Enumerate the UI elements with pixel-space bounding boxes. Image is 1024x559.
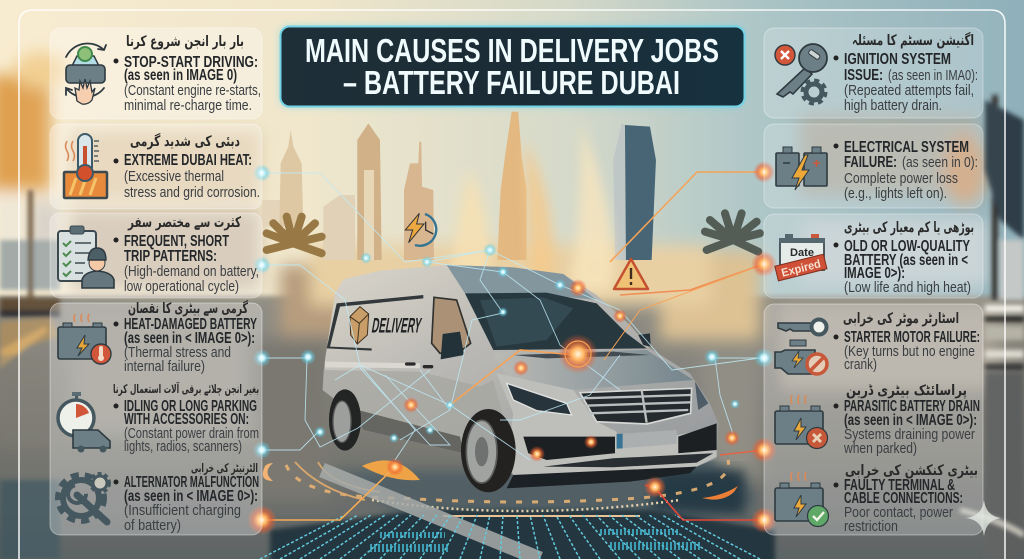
side window — [432, 297, 471, 353]
text: extreme heat: EXTREME DUBAI HEAT: — [124, 152, 252, 169]
text: stop-start driving — [114, 34, 261, 114]
text: stop-start driving: بار بار انجن شروع کرنا — [126, 34, 244, 50]
headlight — [507, 383, 572, 415]
text: alternator: (Insufficient charging — [124, 502, 241, 519]
icon: twin batteries with bolt — [776, 147, 827, 190]
text: idling: IDLING OR LONG PARKING — [124, 398, 257, 415]
text: parasitic drain: Systems draining power — [844, 426, 975, 443]
panel: heat damage, idling, alternator — [50, 299, 262, 535]
text: extreme heat: دبئی کی شدید گرمی — [130, 132, 240, 150]
mirror — [441, 332, 464, 359]
text: short trips — [114, 215, 259, 295]
license plate — [617, 430, 677, 449]
panel: ignition — [764, 28, 983, 118]
text: short trips: low operational cycle) — [124, 278, 239, 295]
icon: key, error and gear — [775, 44, 827, 104]
text: short trips: TRIP PATTERNS: — [124, 248, 217, 265]
text: starter: crank) — [844, 356, 877, 373]
icon: warning triangle — [614, 259, 648, 289]
icon: key and engine — [775, 320, 827, 374]
text: extreme heat — [114, 132, 260, 201]
icon: stopwatch and van — [58, 392, 110, 452]
text: heat-damaged battery: HEAT-DAMAGED BATTERY — [124, 316, 257, 333]
text: faulty terminals — [834, 463, 978, 535]
text: starter: اسٹارٹر موٹر کی خرابی — [843, 311, 959, 327]
text: short trips: (High-demand on battery, — [124, 263, 259, 280]
icon: sparkle — [966, 500, 1001, 536]
text: stop-start driving: minimal re-charge time. — [124, 97, 252, 114]
text: idling: lights, radios, scanners) — [124, 438, 242, 455]
text: ignition: high battery drain. — [844, 97, 942, 114]
text: faulty terminals: restriction — [844, 518, 898, 535]
text: old battery: (Low life and high heat) — [844, 279, 971, 296]
text: parasitic drain — [834, 383, 980, 457]
text: starter — [834, 311, 980, 373]
text: old battery: IMAGE 0>): — [844, 265, 905, 282]
text: ignition: (Repeated attempts fail, — [844, 82, 974, 99]
panel: stop-start driving — [50, 28, 262, 119]
text: alternator: (as seen in < IMAGE 0>): — [124, 488, 258, 505]
text: ignition — [834, 31, 978, 114]
text: idling: (Constant power drain from — [124, 425, 259, 442]
text: ignition: IGNITION SYSTEM — [844, 51, 951, 68]
delivery logo — [350, 307, 423, 344]
circuit network lines over van — [262, 173, 764, 460]
flames and heat behind van — [450, 120, 614, 300]
icon: clipboard and driver — [58, 226, 114, 288]
icon: car with hand — [66, 44, 106, 104]
text: heat-damaged battery: (Thermal stress and — [124, 344, 231, 361]
text: electrical: FAILURE: — [844, 154, 897, 171]
text: old battery: BATTERY (as seen in < — [844, 252, 968, 269]
text: parasitic drain: پراسائٹک بیٹری ڈرین — [846, 383, 967, 399]
city skyline — [262, 112, 760, 260]
text: heat-damaged battery: internal failure) — [124, 358, 205, 375]
icon: heat-damaged battery — [58, 314, 111, 364]
panel: starter, drain, terminals — [764, 304, 983, 535]
ground grid and orange rings — [260, 450, 775, 559]
title banner — [280, 26, 744, 107]
icon: lightning clock — [405, 213, 436, 246]
text: electrical: Complete power loss — [844, 170, 958, 187]
text: starter: (Key turns but no engine — [844, 343, 975, 360]
text: electrical: (as seen in 0): — [902, 154, 978, 171]
text: heat-damaged battery — [114, 299, 257, 375]
text: electrical: ELECTRICAL SYSTEM — [844, 139, 969, 156]
text: parasitic drain: (as seen in < IMAGE 0>): — [844, 412, 977, 429]
teal digital grid — [260, 515, 760, 559]
text: idling: بغیر انجن چلائے برقی آلات استعمال کرنا — [113, 381, 259, 396]
icon: expired battery — [775, 234, 827, 281]
title text: – BATTERY FAILURE DUBAI — [343, 64, 680, 101]
icon: battery with check — [775, 472, 828, 526]
windshield — [465, 293, 647, 350]
text: alternator — [114, 461, 259, 534]
text: idling — [113, 381, 259, 455]
text: ignition: اگنیشن سسٹم کا مسئلہ — [852, 31, 974, 49]
text: faulty terminals: CABLE CONNECTIONS: — [844, 490, 963, 507]
text: extreme heat: stress and grid corrosion. — [124, 184, 260, 201]
front fender — [497, 373, 717, 475]
text: short trips: کثرت سے مختصر سفر — [127, 215, 241, 231]
icon: gear and wrench — [58, 474, 110, 522]
text: alternator: ALTERNATOR MALFUNCTION — [124, 474, 259, 491]
text: alternator: الٹرنیٹر کی خرابی — [191, 461, 258, 475]
grille — [580, 388, 692, 424]
text: electrical — [834, 139, 978, 202]
icon: expired battery: Expired — [780, 258, 822, 280]
text: stop-start driving: (Constant engine re-starts, — [124, 82, 261, 99]
panel: short trips — [50, 213, 262, 298]
icon: expired battery: Date — [790, 247, 814, 259]
text: parasitic drain: when parked) — [843, 440, 917, 457]
text: stop-start driving: STOP-START DRIVING: — [124, 54, 258, 71]
panel: extreme heat — [50, 124, 262, 209]
text: faulty terminals: FAULTY TERMINAL & — [844, 477, 955, 494]
text: ignition: (as seen in IMA0): — [888, 67, 978, 84]
delivery van: DELIVERY — [370, 315, 423, 338]
title text: MAIN CAUSES IN DELIVERY JOBS — [305, 32, 719, 69]
icon: thermometer on battery — [64, 134, 107, 198]
rear wheel — [329, 389, 361, 451]
text: alternator: of battery) — [124, 517, 181, 534]
text: extreme heat: (Excessive thermal — [124, 168, 224, 185]
van body — [323, 265, 718, 475]
title text — [305, 32, 719, 101]
text: electrical: (e.g., lights left on). — [844, 185, 947, 202]
lower bumper intakes — [523, 437, 615, 460]
panel: electrical — [764, 124, 983, 208]
text: ignition: ISSUE: — [844, 67, 883, 84]
text: idling: WITH ACCESSORIES ON: — [124, 411, 249, 428]
glowing nodes — [247, 161, 777, 535]
palm tree right — [705, 213, 760, 252]
left panels — [50, 28, 262, 535]
text: faulty terminals: بیٹری کنکشن کی خرابی — [845, 463, 978, 479]
icon: parasitic drain battery — [775, 395, 828, 448]
panel: old battery — [764, 214, 983, 298]
palm tree left — [267, 217, 322, 253]
hood — [493, 350, 693, 390]
text: old battery — [834, 220, 974, 296]
text: old battery: OLD OR LOW-QUALITY — [844, 238, 970, 255]
orange failure connectors — [262, 172, 764, 520]
text: short trips: FREQUENT, SHORT — [124, 233, 229, 250]
front wheel — [461, 409, 516, 492]
text: stop-start driving: (as seen in IMAGE 0) — [124, 67, 237, 84]
text: heat-damaged battery: گرمی سے بیٹری کا نقصان — [128, 299, 248, 317]
right panels — [764, 28, 983, 535]
text: heat-damaged battery: (as seen in < IMAGE 0>): — [124, 330, 255, 347]
delivery van — [323, 265, 718, 492]
text: faulty terminals: Poor contact, power — [844, 504, 953, 521]
